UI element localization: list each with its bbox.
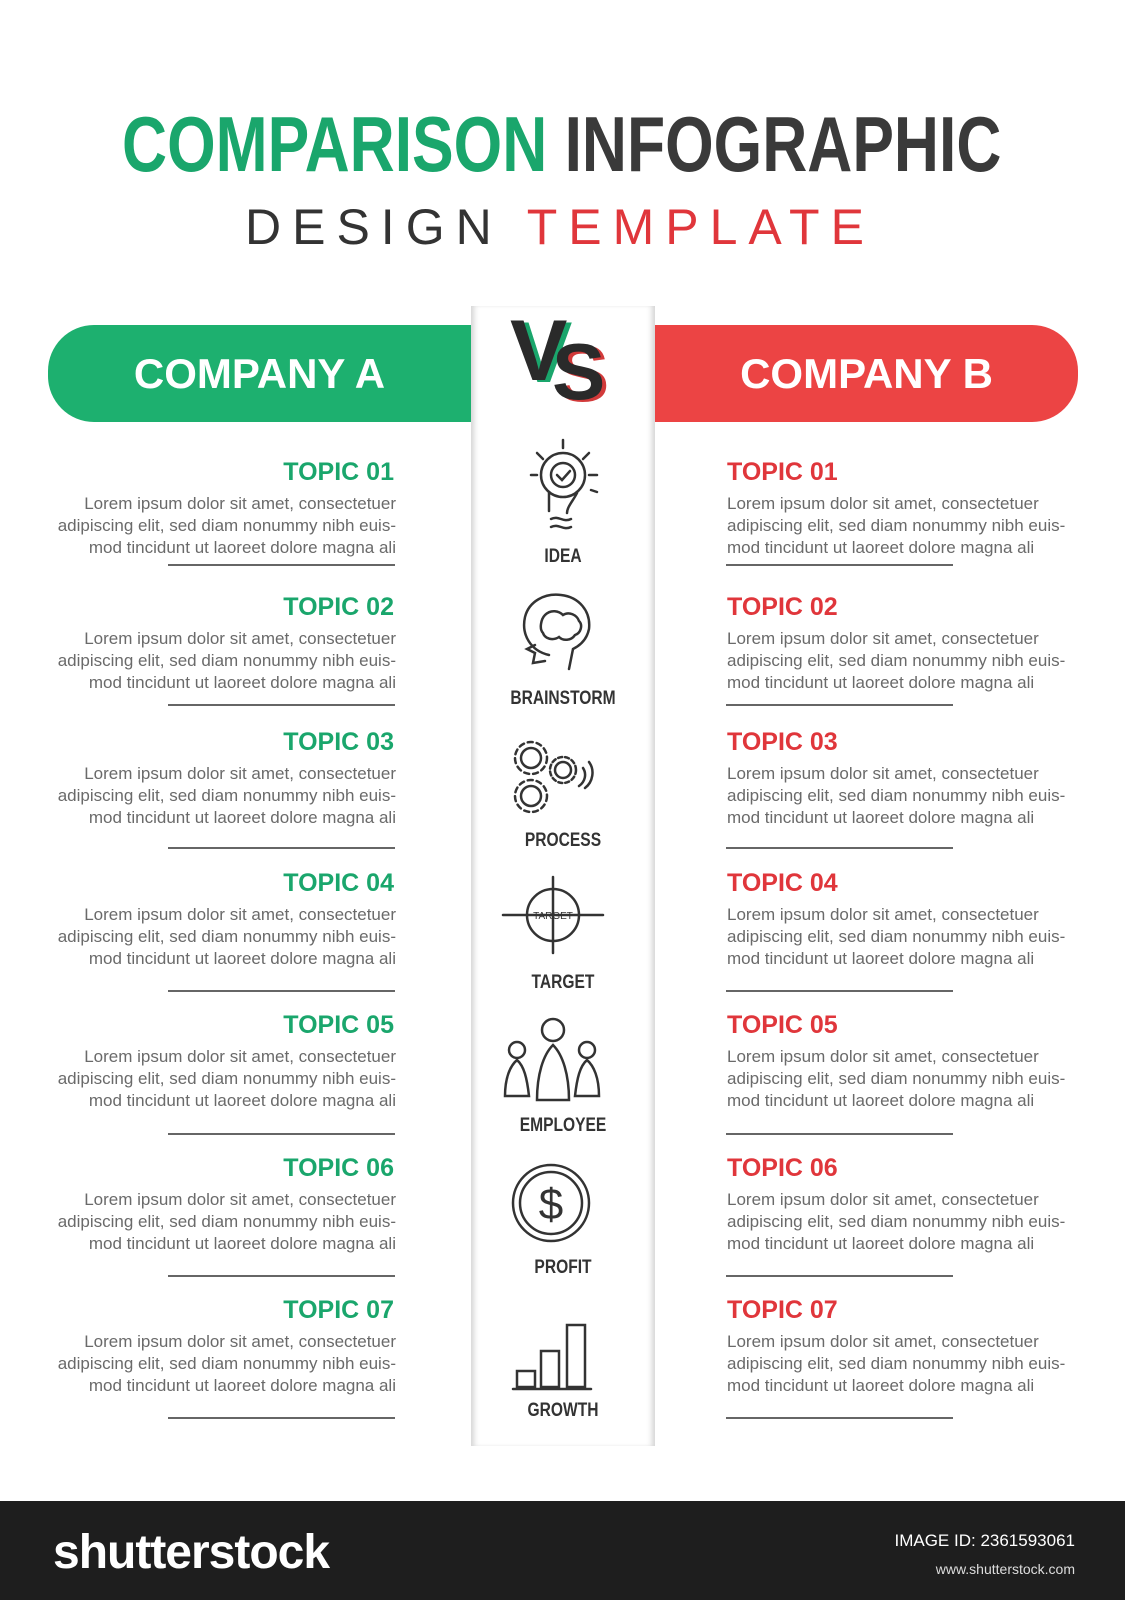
left topics: mod tincidunt ut laoreet dolore magna ali [89, 1376, 396, 1395]
left topics: mod tincidunt ut laoreet dolore magna ali [89, 1091, 396, 1110]
right topics: mod tincidunt ut laoreet dolore magna ali [727, 538, 1034, 557]
label: GROWTH: GROWTH [528, 1400, 598, 1421]
right topics: Lorem ipsum dolor sit amet, consectetuer [727, 764, 1039, 783]
right topics: mod tincidunt ut laoreet dolore magna ali [727, 808, 1034, 827]
right topics: mod tincidunt ut laoreet dolore magna ali [727, 949, 1034, 968]
header: company A [48, 325, 471, 422]
label: PROFIT: PROFIT [534, 1257, 592, 1278]
right topics: mod tincidunt ut laoreet dolore magna ali [727, 1234, 1034, 1253]
header: company B [655, 325, 1078, 422]
right topics: mod tincidunt ut laoreet dolore magna ali [727, 1091, 1034, 1110]
left topics: mod tincidunt ut laoreet dolore magna ali [89, 949, 396, 968]
label: EMPLOYEE: EMPLOYEE [520, 1115, 606, 1136]
subtitle: DESIGN TEMPLATE [245, 199, 875, 255]
left topics: mod tincidunt ut laoreet dolore magna ali [89, 808, 396, 827]
footer id [894, 1531, 1075, 1577]
footer id: IMAGE ID: 2361593061 [894, 1531, 1075, 1550]
left topics: Lorem ipsum dolor sit amet, consectetuer [84, 905, 396, 924]
header: company A: COMPANY A [134, 350, 385, 397]
right topics: adipiscing elit, sed diam nonummy nibh euis- [727, 1212, 1065, 1231]
left topics: adipiscing elit, sed diam nonummy nibh euis- [58, 1069, 396, 1088]
icon: target: TARGET [533, 911, 573, 922]
icons column [502, 438, 604, 1390]
right topics: TOPIC 05 [727, 1011, 838, 1039]
right topics: adipiscing elit, sed diam nonummy nibh euis- [727, 786, 1065, 805]
left topics: mod tincidunt ut laoreet dolore magna ali [89, 673, 396, 692]
right topics: TOPIC 07 [727, 1296, 838, 1324]
right topics: Lorem ipsum dolor sit amet, consectetuer [727, 1047, 1039, 1066]
right topics [726, 458, 1065, 1419]
right topics: TOPIC 04 [727, 869, 838, 897]
left topics: adipiscing elit, sed diam nonummy nibh euis- [58, 516, 396, 535]
left topics: mod tincidunt ut laoreet dolore magna ali [89, 1234, 396, 1253]
right topics: mod tincidunt ut laoreet dolore magna ali [727, 673, 1034, 692]
footer bar [0, 1501, 1125, 1600]
label: TARGET: TARGET [532, 972, 594, 993]
right topics: TOPIC 02 [727, 593, 838, 621]
center column [471, 306, 655, 1446]
VS logo: V [515, 305, 572, 401]
left topics [58, 458, 396, 1419]
label: PROCESS: PROCESS [525, 830, 601, 851]
right topics: Lorem ipsum dolor sit amet, consectetuer [727, 1190, 1039, 1209]
left topics: adipiscing elit, sed diam nonummy nibh euis- [58, 927, 396, 946]
left topics: Lorem ipsum dolor sit amet, consectetuer [84, 494, 396, 513]
left topics: Lorem ipsum dolor sit amet, consectetuer [84, 1047, 396, 1066]
left topics: Lorem ipsum dolor sit amet, consectetuer [84, 629, 396, 648]
icon: employees [505, 1019, 599, 1100]
icon: growth bars [513, 1325, 591, 1389]
label: BRAINSTORM: BRAINSTORM [510, 688, 616, 709]
right topics: TOPIC 03 [727, 728, 838, 756]
right topics: Lorem ipsum dolor sit amet, consectetuer [727, 629, 1039, 648]
right topics: mod tincidunt ut laoreet dolore magna ali [727, 1376, 1034, 1395]
icon: target [503, 877, 603, 953]
left topics: TOPIC 06 [283, 1154, 394, 1182]
right topics: TOPIC 01 [727, 458, 838, 486]
header: company B: COMPANY B [740, 350, 993, 397]
right topics: adipiscing elit, sed diam nonummy nibh euis- [727, 1354, 1065, 1373]
icon: brainstorm head [524, 595, 589, 669]
VS logo: V [510, 303, 567, 399]
VS logo: S [556, 329, 609, 418]
label: IDEA: IDEA [544, 546, 582, 567]
left topics: TOPIC 04 [283, 869, 394, 897]
left topics: Lorem ipsum dolor sit amet, consectetuer [84, 764, 396, 783]
right topics: Lorem ipsum dolor sit amet, consectetuer [727, 905, 1039, 924]
right topics: adipiscing elit, sed diam nonummy nibh euis- [727, 927, 1065, 946]
right topics: adipiscing elit, sed diam nonummy nibh euis- [727, 516, 1065, 535]
left topics: TOPIC 01 [283, 458, 394, 486]
left topics: adipiscing elit, sed diam nonummy nibh euis- [58, 1212, 396, 1231]
right topics: Lorem ipsum dolor sit amet, consectetuer [727, 1332, 1039, 1351]
left topics: adipiscing elit, sed diam nonummy nibh euis- [58, 786, 396, 805]
left topics: Lorem ipsum dolor sit amet, consectetuer [84, 1332, 396, 1351]
left topics: Lorem ipsum dolor sit amet, consectetuer [84, 1190, 396, 1209]
left topics: TOPIC 02 [283, 593, 394, 621]
left topics: TOPIC 03 [283, 728, 394, 756]
right topics: adipiscing elit, sed diam nonummy nibh euis- [727, 651, 1065, 670]
left topics: adipiscing elit, sed diam nonummy nibh euis- [58, 651, 396, 670]
footer logo: shutterstock [53, 1526, 329, 1579]
left topics: adipiscing elit, sed diam nonummy nibh euis- [58, 1354, 396, 1373]
right topics: adipiscing elit, sed diam nonummy nibh euis- [727, 1069, 1065, 1088]
icon: profit coin: $ [539, 1180, 563, 1229]
right topics: TOPIC 06 [727, 1154, 838, 1182]
left topics: mod tincidunt ut laoreet dolore magna ali [89, 538, 396, 557]
title: COMPARISON INFOGRAPHIC [122, 100, 1001, 188]
VS logo: S [552, 327, 605, 416]
left topics: TOPIC 05 [283, 1011, 394, 1039]
icon: idea bulb [531, 440, 597, 528]
icon: process gears [515, 742, 592, 812]
VS logo [510, 303, 609, 418]
footer id: www.shutterstock.com [936, 1561, 1075, 1577]
right topics: Lorem ipsum dolor sit amet, consectetuer [727, 494, 1039, 513]
left topics: TOPIC 07 [283, 1296, 394, 1324]
icon: profit coin [513, 1165, 589, 1241]
